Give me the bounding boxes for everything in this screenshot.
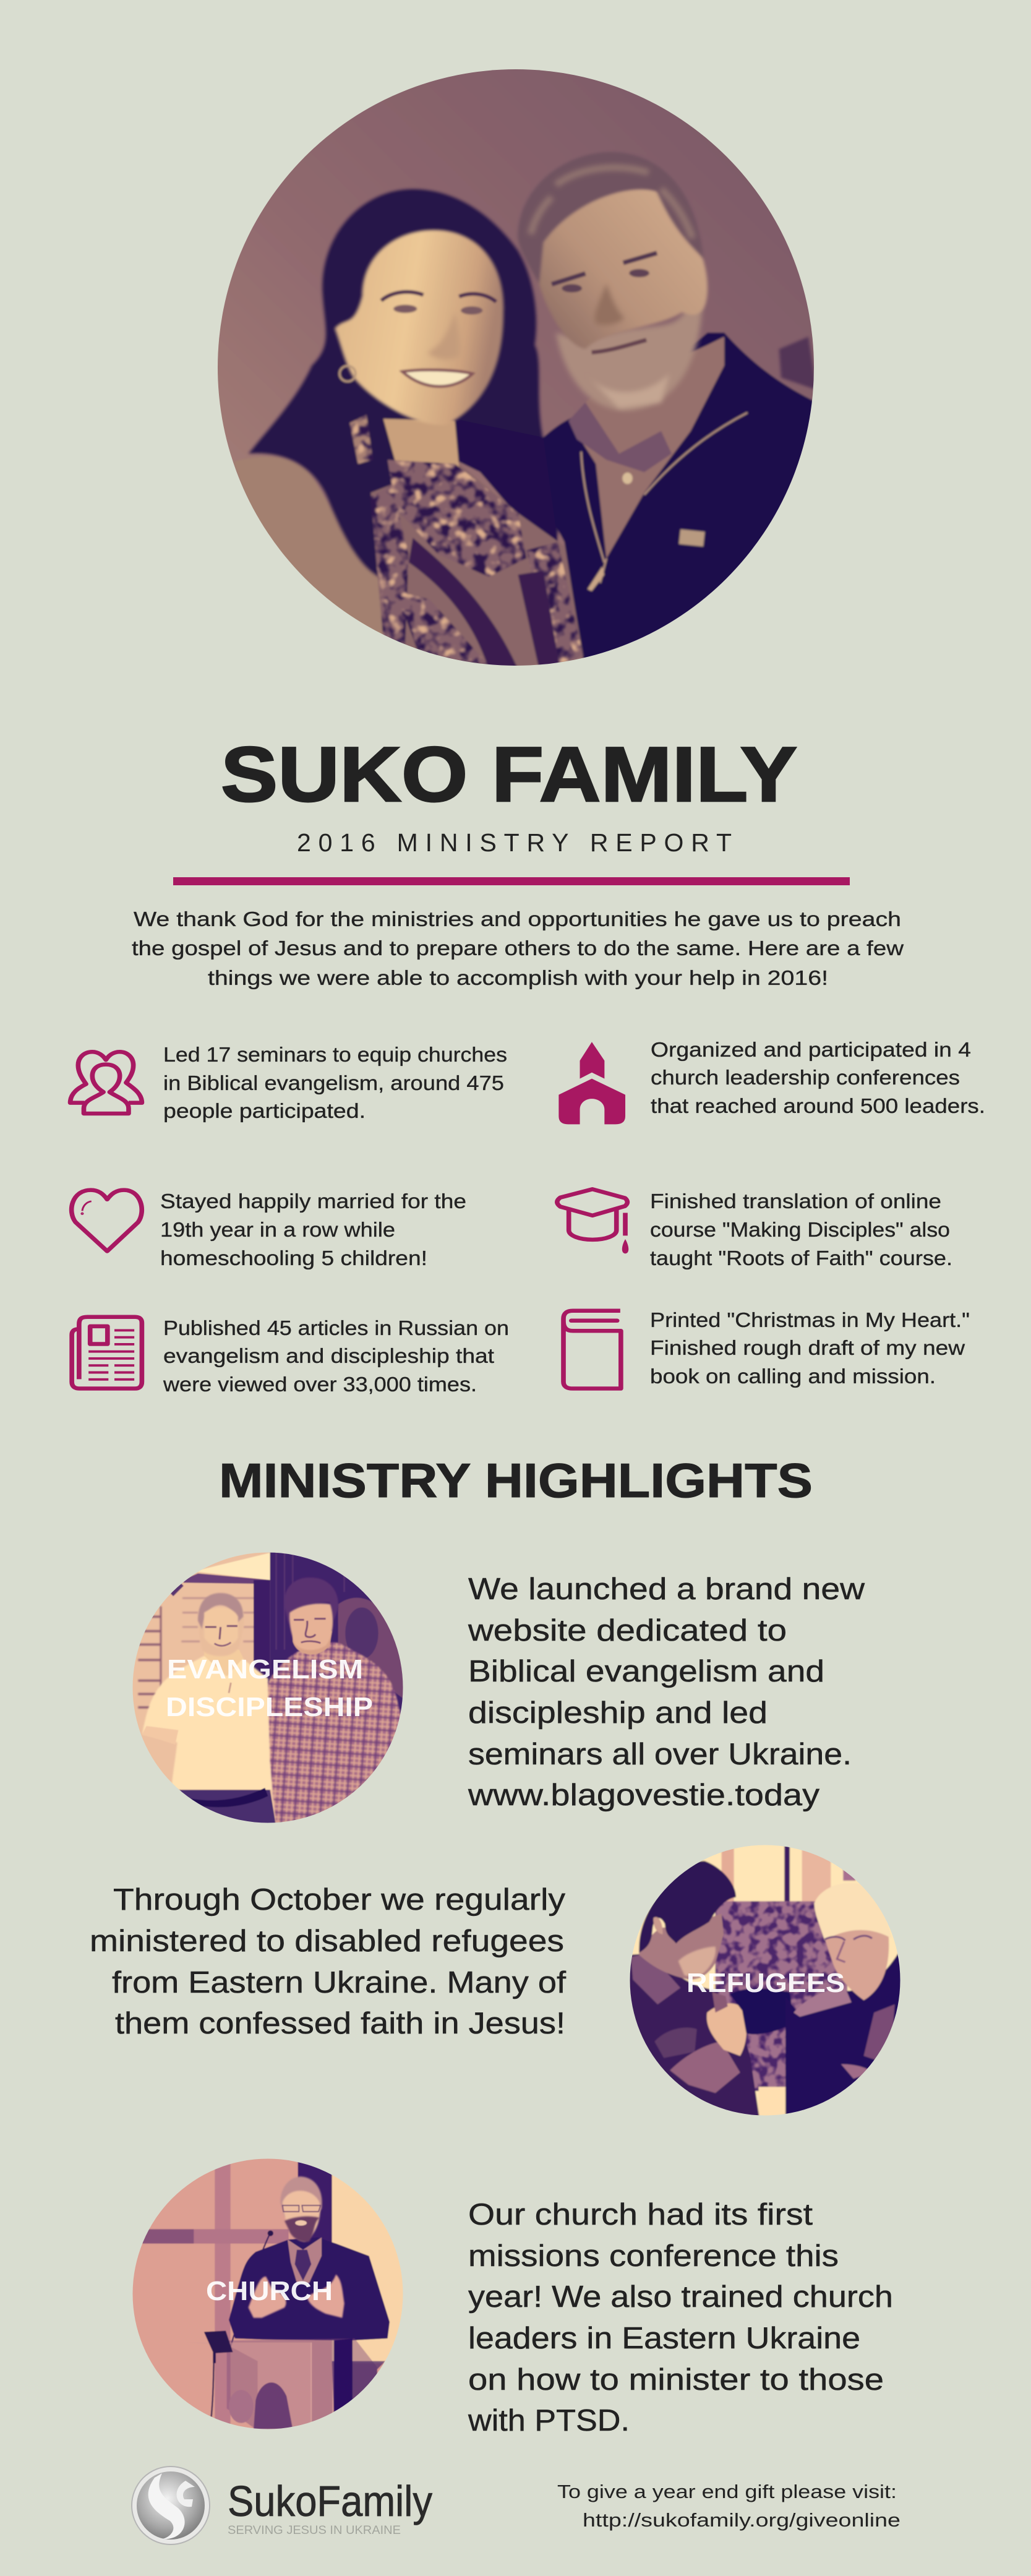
intro paragraph: the gospel of Jesus and to prepare others to do the same. Here are a few [132,937,904,960]
highlight text: new website: Biblical evangelism and [468,1655,824,1688]
highlight text: refugees ministry: Through October we regularly [113,1883,566,1917]
text: seminars: Led 17 seminars to equip churches [163,1043,507,1066]
text: marriage [160,1190,466,1269]
text: seminars [163,1043,507,1122]
highlight text: refugees ministry: ministered to disabled refugees [90,1925,564,1958]
text: conferences [651,1038,985,1117]
text: translation: course "Making Disciples" also [650,1218,950,1241]
icon: Suko Family emblem [132,2467,210,2544]
icon: newspaper [72,1317,142,1389]
text: articles: were viewed over 33,000 times. [163,1373,477,1396]
accent divider bar [173,877,850,885]
accomplishment: conferences [558,1038,985,1124]
text: conferences: that reached around 500 leaders. [651,1094,985,1117]
highlight text: refugees ministry: them confessed faith in Jesus! [115,2007,565,2040]
photo circle: refugees [625,1842,907,2124]
highlight text: new website [468,1573,865,1812]
accomplishment: articles [72,1316,509,1396]
text: seminars: in Biblical evangelism, around 475 [163,1071,504,1094]
text: conferences: church leadership conferences [651,1066,960,1089]
label: discipleship: DISCIPLESHIP [166,1692,373,1722]
photo: two men outside a building [130,1551,406,1827]
highlight text: refugees ministry [90,1883,566,2040]
icon: group of people [71,1052,142,1114]
giving call to action: To give a year end gift please visit: [557,2481,897,2502]
label: church: CHURCH [206,2276,333,2306]
text: marriage: Stayed happily married for the [160,1190,466,1213]
text: translation: taught "Roots of Faith" course. [650,1247,952,1269]
label: evangelism: EVANGELISM [167,1654,363,1685]
text: books: Printed "Christmas in My Heart." [650,1308,970,1331]
accomplishment: marriage [72,1190,466,1269]
giving call to action: http://sukofamily.org/giveonline [583,2509,901,2531]
photo: man preaching at a lectern [130,2157,406,2433]
main photo: the Suko couple in a circle [218,69,814,666]
text: books: Finished rough draft of my new [650,1336,965,1359]
highlight text: missions conference: Our church had its first [468,2198,813,2231]
intro paragraph: We thank God for the ministries and opportunities he gave us to preach [134,908,901,930]
highlight text: missions conference [468,2198,893,2437]
text: translation [650,1190,952,1269]
text: marriage: 19th year in a row while [160,1218,395,1241]
highlight text: missions conference: missions conference this [468,2239,839,2273]
intro paragraph: things we were able to accomplish with your help in 2016! [208,966,828,989]
highlight text: new website: discipleship and led [468,1696,768,1730]
highlight text: new website: www.blagovestie.today [468,1779,820,1812]
highlight text: missions conference: on how to minister to those [468,2363,884,2397]
highlight text: new website: We launched a brand new [468,1573,865,1606]
tagline: SERVING JESUS IN UKRAINE [228,2524,401,2537]
text: conferences: Organized and participated in 4 [651,1038,971,1061]
highlight text: missions conference: year! We also trained church [468,2280,893,2314]
highlight text: new website: website dedicated to [468,1614,787,1647]
accomplishment: books [563,1308,970,1389]
footer logo [132,2467,432,2544]
text: books [650,1308,970,1388]
wordmark: SukoFamily [228,2477,432,2525]
text: articles [163,1316,509,1396]
heading: ministry highlights: MINISTRY HIGHLIGHTS [219,1453,813,1508]
subtitle: 2016 MINISTRY REPORT [297,828,732,857]
accomplishment: translation [557,1189,952,1269]
highlight text: missions conference: with PTSD. [468,2404,630,2437]
accomplishment: seminars [71,1043,507,1122]
giving call to action [557,2481,901,2531]
icon: church building [558,1042,625,1124]
intro paragraph [132,908,904,989]
photo circle: evangelism and discipleship [130,1551,406,1827]
label: refugees: REFUGEES [687,1968,845,1998]
photo circle: church [130,2157,406,2433]
text: marriage: homeschooling 5 children! [160,1247,427,1269]
icon: graduation cap [557,1189,628,1253]
text: articles: evangelism and discipleship that [163,1344,494,1367]
title: SUKO FAMILY [221,731,797,818]
text: seminars: people participated. [163,1099,366,1122]
text: translation: Finished translation of online [650,1190,941,1213]
icon: heart [72,1190,142,1251]
text: books: book on calling and mission. [650,1365,936,1388]
icon: book [563,1311,621,1389]
photo: two men praying [625,1842,907,2124]
highlight text: new website: seminars all over Ukraine. [468,1738,852,1771]
highlight text: missions conference: leaders in Eastern Ukraine [468,2322,860,2355]
text: articles: Published 45 articles in Russian on [163,1316,509,1339]
highlight text: refugees ministry: from Eastern Ukraine. Many of [112,1966,566,1999]
